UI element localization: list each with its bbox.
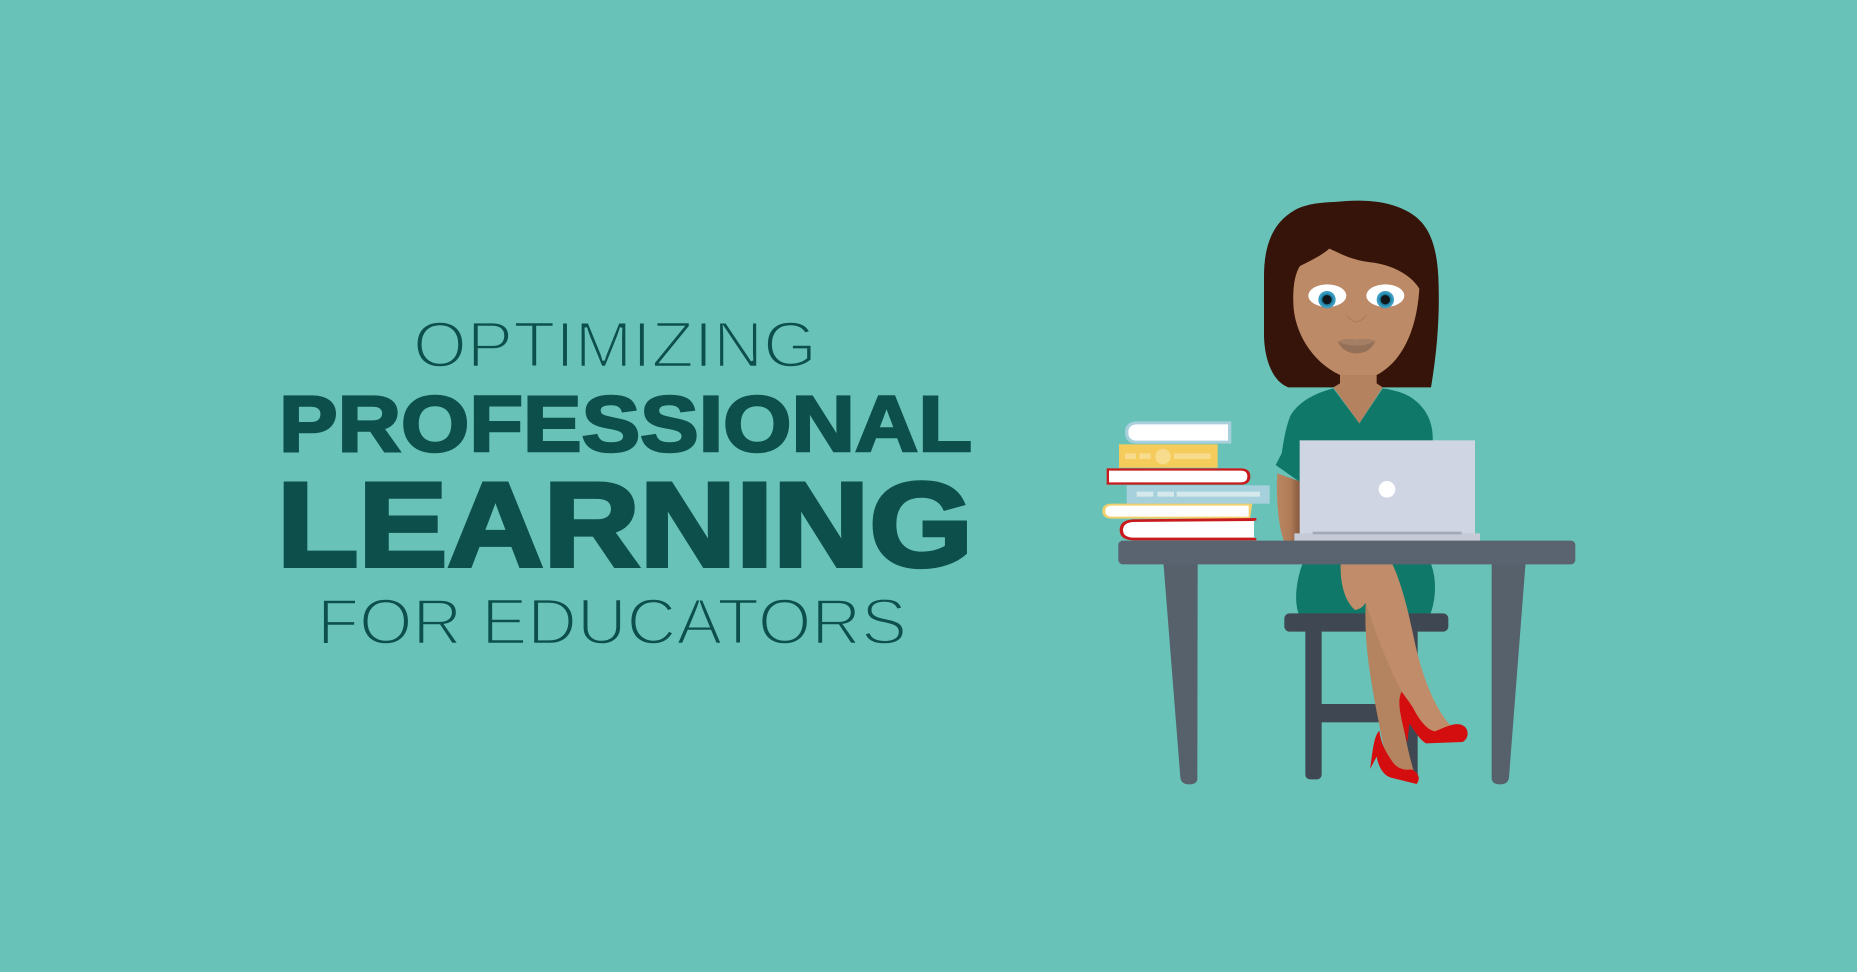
book stack bbox=[1102, 421, 1270, 540]
title line: professional: PROFESSIONAL bbox=[279, 379, 972, 468]
nose bbox=[1347, 315, 1367, 322]
eye: right bbox=[1366, 284, 1404, 308]
title bbox=[277, 308, 973, 658]
head bbox=[1264, 201, 1439, 393]
shoe: lower bbox=[1370, 731, 1419, 784]
book: white with yellow cover bbox=[1102, 504, 1252, 519]
neck bbox=[1340, 367, 1377, 393]
lower leg bbox=[1365, 603, 1414, 772]
neckline bbox=[1333, 383, 1383, 423]
table leg: right bbox=[1492, 562, 1526, 784]
book: white with blue cover bbox=[1125, 421, 1231, 444]
title line: learning: LEARNING bbox=[277, 458, 973, 592]
arm bbox=[1277, 473, 1301, 541]
shoe: upper bbox=[1399, 692, 1468, 743]
eye: left bbox=[1308, 284, 1346, 308]
skirt bbox=[1296, 562, 1435, 615]
table leg: left bbox=[1163, 562, 1198, 784]
book: red bottom bbox=[1120, 518, 1256, 540]
title line: optimizing: OPTIMIZING bbox=[413, 308, 817, 381]
table top bbox=[1118, 541, 1575, 564]
crossed leg bbox=[1341, 563, 1451, 733]
laptop bbox=[1294, 440, 1480, 541]
stool bbox=[1284, 613, 1448, 779]
book: red bbox=[1107, 468, 1250, 485]
book: light blue bbox=[1127, 485, 1270, 504]
woman's torso, laptop, books and table top bbox=[1102, 383, 1575, 564]
hair bbox=[1264, 201, 1439, 387]
face bbox=[1293, 249, 1419, 375]
crossed legs and red shoes bbox=[1341, 563, 1468, 784]
stool, skirt and table legs bbox=[1163, 562, 1526, 784]
title line: for educators: FOR EDUCATORS bbox=[317, 585, 907, 658]
lips bbox=[1338, 339, 1375, 353]
dress top bbox=[1276, 388, 1433, 483]
book: yellow bbox=[1119, 444, 1218, 468]
